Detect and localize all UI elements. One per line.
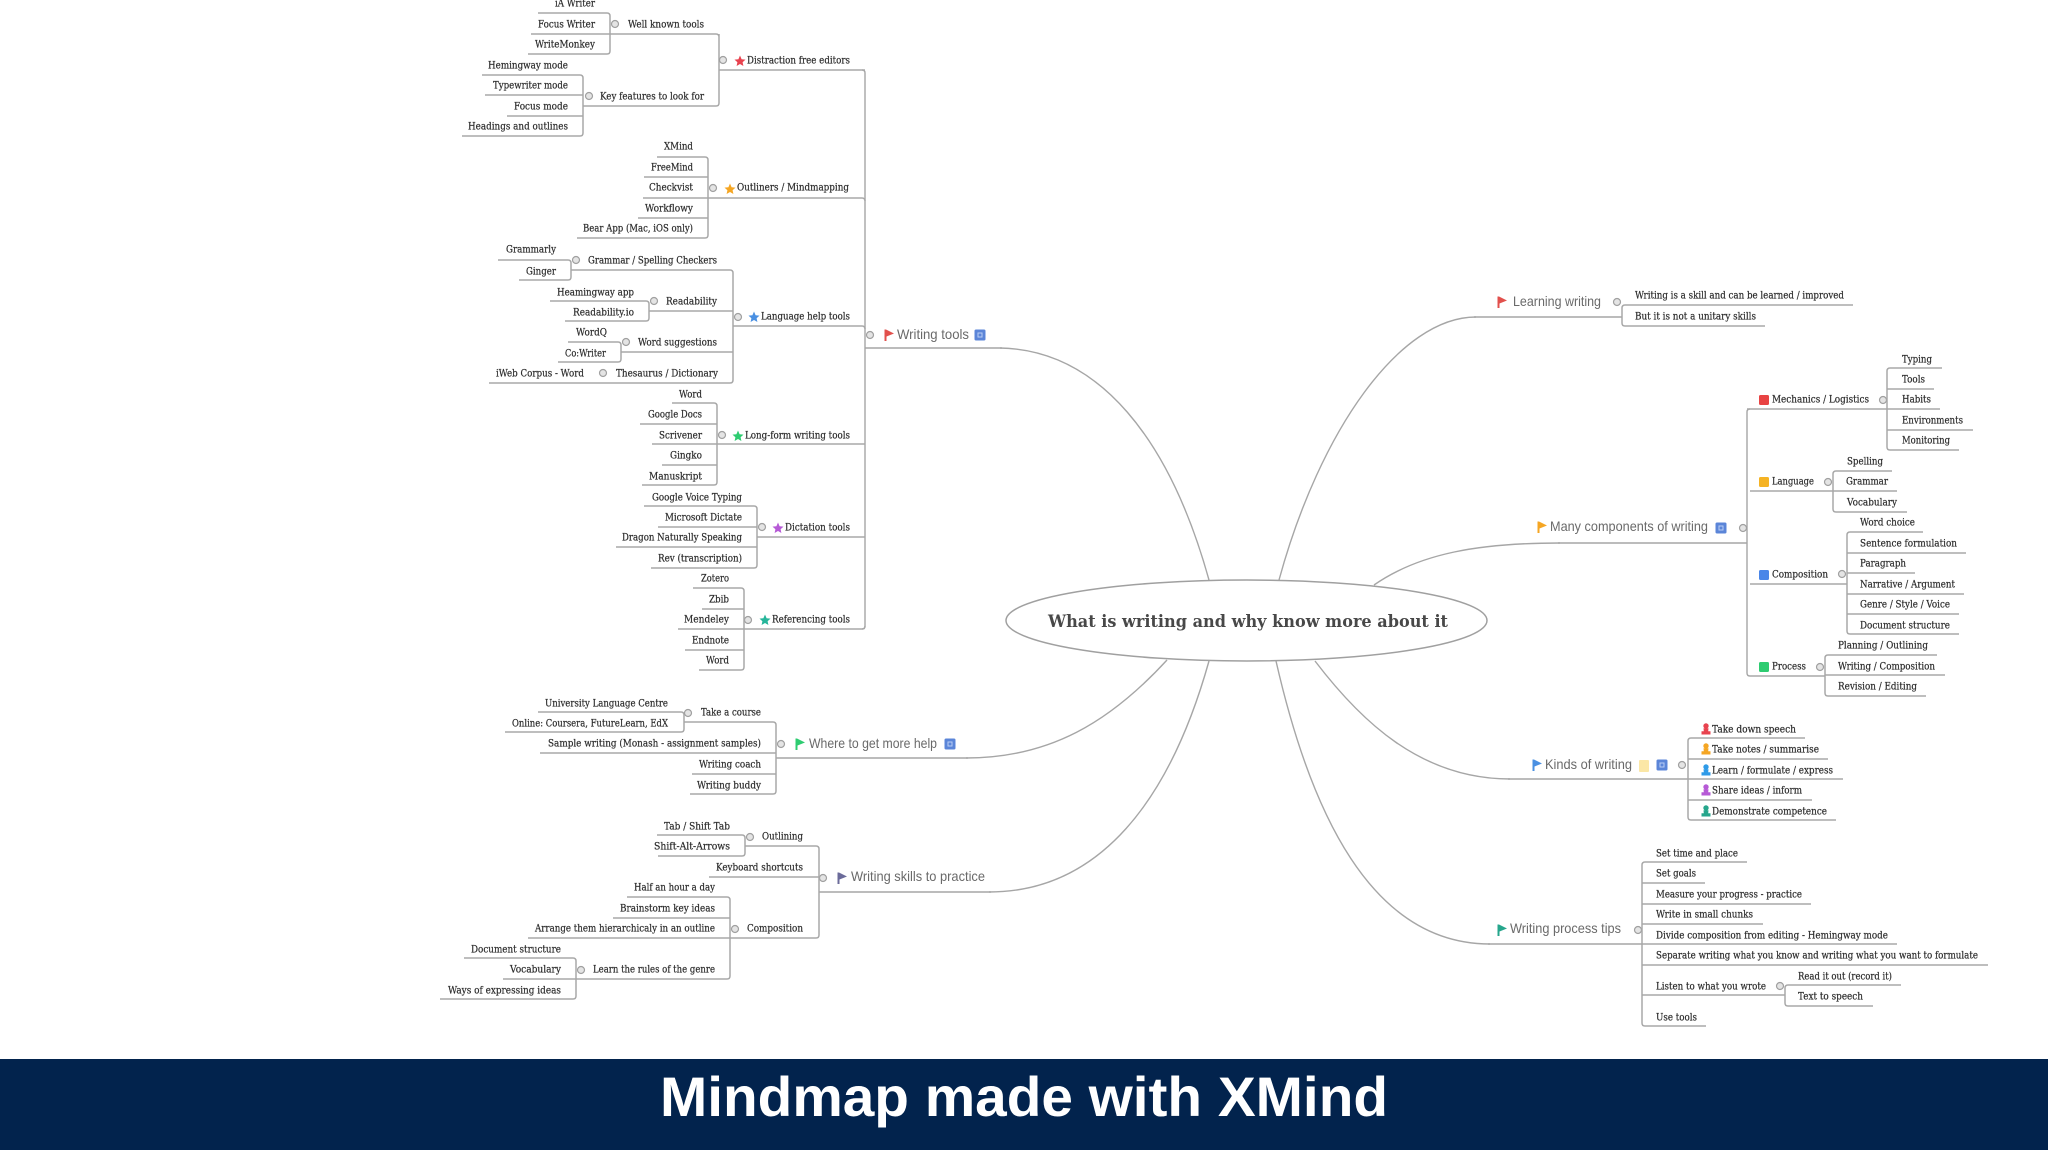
branch: Where to get more help: Where to get more help: [809, 735, 937, 751]
branch: Writing process tips: Use tools: [1656, 1012, 1697, 1024]
sub-branch: Mechanics / Logistics: Mechanics / Logistics: [1772, 394, 1869, 406]
sub-branch: Outliners / Mindmapping: Outliners / Mindmapping: [737, 182, 849, 194]
branch: Writing skills to practice: Shift-Alt-Arrows: [654, 840, 730, 852]
sub-branch: Language help tools: WordQ: [576, 326, 607, 338]
sub-branch: Outliners / Mindmapping: [577, 140, 865, 238]
sub-branch: Distraction free editors: Key features to look for: [600, 90, 705, 102]
sub-branch: Dictation tools: Dictation tools: [785, 522, 850, 534]
central topic: What is writing and why know more about it: [1047, 612, 1448, 632]
sub-branch: Process: Writing / Composition: [1838, 660, 1935, 672]
sub-branch: Distraction free editors: WriteMonkey: [535, 38, 595, 50]
sub-branch: Distraction free editors: Focus mode: [514, 100, 568, 112]
caption banner: Mindmap made with XMind: [660, 1065, 1388, 1128]
sub-branch: Mechanics / Logistics: Monitoring: [1902, 434, 1950, 446]
branch: Kinds of writing: Take down speech: [1712, 724, 1796, 736]
sub-branch: Distraction free editors: Well known tools: [628, 18, 704, 30]
sub-branch: Long-form writing tools: Scrivener: [659, 430, 703, 442]
branch: Kinds of writing: Take notes / summarise: [1712, 744, 1819, 756]
branch: Writing process tips: Read it out (record it): [1798, 970, 1892, 982]
sub-branch: Language help tools: iWeb Corpus - Word: [496, 368, 584, 380]
branch: Writing skills to practice: Composition: [747, 922, 803, 934]
sub-branch: Mechanics / Logistics: Tools: [1902, 374, 1925, 386]
branch: Writing skills to practice: [440, 820, 991, 999]
sub-branch: Composition: [1750, 516, 1966, 634]
sub-branch: Distraction free editors: Headings and outlines: [468, 120, 568, 132]
sub-branch: Outliners / Mindmapping: FreeMind: [651, 162, 693, 174]
sub-branch: Referencing tools: Referencing tools: [772, 614, 850, 626]
sub-branch: Referencing tools: Zbib: [709, 594, 729, 606]
sub-branch: Dictation tools: [616, 492, 865, 568]
branch: Where to get more help: Sample writing (Monash - assignment samples): [548, 738, 761, 750]
branch heading: Many components of writing: Many components of writing: [1550, 518, 1708, 534]
sub-branch: Long-form writing tools: [640, 388, 865, 485]
branch: Learning writing: Learning writing: [1513, 293, 1601, 309]
sub-branch: Language help tools: Co:Writer: [565, 348, 607, 360]
branch: Writing tools: [462, 0, 1002, 670]
branch: Many components of writing: [1538, 354, 1973, 696]
branch: Writing skills to practice: Writing skills to practice: [851, 868, 985, 884]
sub-branch: Process: [1750, 640, 1945, 696]
branch heading: Writing tools: [862, 70, 1002, 629]
branch: Where to get more help: University Language Centre: [545, 698, 668, 710]
sub-branch: Outliners / Mindmapping: Workflowy: [645, 202, 693, 214]
branch: Writing process tips: Measure your progress - practice: [1656, 888, 1802, 900]
sub-branch: Referencing tools: Zotero: [701, 572, 729, 584]
sub-branch: Dictation tools: Microsoft Dictate: [665, 512, 742, 524]
sub-branch: Language: Grammar: [1846, 476, 1889, 488]
branch: Kinds of writing: Share ideas / inform: [1712, 784, 1802, 796]
sub-branch: Distraction free editors: Distraction free editors: [747, 54, 850, 66]
branch: Where to get more help: [505, 698, 968, 794]
sub-branch: Language help tools: Readability: [666, 296, 717, 308]
branch: Learning writing: But it is not a unitary skills: [1635, 310, 1756, 322]
branch: Writing process tips: Write in small chunks: [1656, 908, 1753, 920]
branch: Where to get more help: Online: Coursera, FutureLearn, EdX: [512, 718, 668, 730]
sub-branch: Referencing tools: [678, 572, 865, 670]
sub-branch: Composition: Document structure: [1860, 620, 1950, 632]
sub-branch: Language help tools: Ginger: [526, 266, 557, 278]
sub-branch: Language help tools: Heamingway app: [557, 286, 634, 298]
branch: Writing skills to practice: Tab / Shift Tab: [664, 820, 730, 832]
sub-branch: Language: Vocabulary: [1846, 496, 1897, 508]
sub-branch: Process: Process: [1772, 660, 1806, 672]
branch: Writing skills to practice: Learn the rules of the genre: [593, 964, 715, 976]
sub-branch: Dictation tools: Rev (transcription): [658, 552, 742, 564]
branch: Writing skills to practice: Arrange them hierarchicaly in an outline: [534, 922, 715, 934]
branch: Learning writing: Writing is a skill and can be learned / improved: [1635, 290, 1844, 302]
sub-branch: Language help tools: Language help tools: [761, 310, 850, 322]
branch: Writing process tips: Listen to what you wrote: [1656, 980, 1766, 992]
branch: Writing process tips: Set goals: [1656, 868, 1696, 880]
sub-branch: Composition: Word choice: [1860, 516, 1915, 528]
sub-branch: Composition: Composition: [1772, 568, 1828, 580]
branch: Learning writing: [1474, 290, 1853, 326]
sub-branch: Long-form writing tools: Google Docs: [648, 408, 702, 420]
sub-branch: Language help tools: Grammarly: [506, 244, 556, 256]
sub-branch: Language: Spelling: [1847, 456, 1883, 468]
sub-branch: Composition: Genre / Style / Voice: [1860, 598, 1950, 610]
sub-branch: Language help tools: Word suggestions: [638, 336, 717, 348]
sub-branch: Composition: Sentence formulation: [1860, 538, 1957, 550]
sub-branch: Language: Language: [1772, 476, 1814, 488]
sub-branch: Language help tools: Grammar / Spelling Checkers: [588, 254, 717, 266]
sub-branch: Referencing tools: Endnote: [692, 634, 729, 646]
connector curves from central topic to main branches: [966, 317, 1560, 944]
branch: Where to get more help: Writing coach: [699, 758, 761, 770]
caption banner: [0, 1059, 2048, 1150]
sub-branch: Process: Planning / Outlining: [1838, 640, 1928, 652]
branch heading: Many components of writing: [1538, 409, 1750, 676]
branch: Writing process tips: Writing process tips: [1510, 920, 1621, 936]
branch: Writing skills to practice: Keyboard shortcuts: [716, 862, 803, 874]
central topic: [1006, 580, 1487, 661]
branch: Kinds of writing: Demonstrate competence: [1712, 806, 1827, 818]
sub-branch: Distraction free editors: Focus Writer: [538, 18, 596, 30]
sub-branch: Language: [1750, 456, 1907, 512]
sub-branch: Distraction free editors: [462, 0, 865, 136]
branch: Kinds of writing: [1508, 723, 1843, 820]
sub-branch: Mechanics / Logistics: Environments: [1902, 414, 1963, 426]
sub-branch: Long-form writing tools: Manuskript: [649, 470, 703, 482]
sub-branch: Long-form writing tools: Word: [679, 388, 702, 400]
sub-branch: Mechanics / Logistics: [1747, 354, 1973, 450]
branch: Writing skills to practice: Ways of expressing ideas: [448, 984, 561, 996]
sub-branch: Long-form writing tools: Long-form writing tools: [745, 430, 850, 442]
sub-branch: Language help tools: Thesaurus / Dictionary: [616, 368, 718, 380]
branch: Kinds of writing: Learn / formulate / express: [1712, 764, 1833, 776]
sub-branch: Language help tools: [489, 244, 865, 383]
branch: Where to get more help: Take a course: [701, 706, 761, 718]
branch: Writing skills to practice: Document structure: [471, 944, 561, 956]
branch: Writing process tips: Text to speech: [1798, 990, 1863, 1002]
branch: Writing process tips: Divide composition from editing - Hemingway mode: [1656, 930, 1888, 942]
branch: Writing skills to practice: Brainstorm key ideas: [620, 902, 715, 914]
sub-branch: Language help tools: Readability.io: [573, 306, 634, 318]
branch heading: Writing tools: Writing tools: [897, 326, 969, 342]
sub-branch: Referencing tools: Mendeley: [684, 614, 729, 626]
sub-branch: Outliners / Mindmapping: Bear App (Mac, iOS only): [583, 222, 693, 234]
branch: Writing process tips: Separate writing what you know and writing what you want to formulate: [1656, 950, 1978, 962]
sub-branch: Dictation tools: Google Voice Typing: [652, 492, 742, 504]
sub-branch: Outliners / Mindmapping: Checkvist: [649, 182, 694, 194]
sub-branch: Mechanics / Logistics: Habits: [1902, 394, 1931, 406]
branch: Where to get more help: Writing buddy: [697, 780, 761, 792]
sub-branch: Composition: Paragraph: [1860, 558, 1906, 570]
sub-branch: Distraction free editors: Typewriter mode: [493, 80, 568, 92]
sub-branch: Process: Revision / Editing: [1838, 680, 1917, 692]
branch: Writing skills to practice: Vocabulary: [509, 964, 561, 976]
branch: Kinds of writing: Kinds of writing: [1545, 756, 1632, 772]
sub-branch: Long-form writing tools: Gingko: [670, 450, 702, 462]
sub-branch: Outliners / Mindmapping: XMind: [664, 140, 693, 152]
branch: Writing skills to practice: Half an hour a day: [634, 882, 715, 894]
sub-branch: Dictation tools: Dragon Naturally Speaking: [622, 532, 742, 544]
sub-branch: Composition: Narrative / Argument: [1860, 578, 1956, 590]
branch: Writing skills to practice: Outlining: [762, 830, 803, 842]
branch: Writing process tips: [1488, 848, 1988, 1026]
sub-branch: Distraction free editors: Hemingway mode: [488, 60, 568, 72]
branch: Writing process tips: Set time and place: [1656, 848, 1738, 860]
sub-branch: Referencing tools: Word: [706, 654, 729, 666]
sub-branch: Mechanics / Logistics: Typing: [1902, 354, 1932, 366]
